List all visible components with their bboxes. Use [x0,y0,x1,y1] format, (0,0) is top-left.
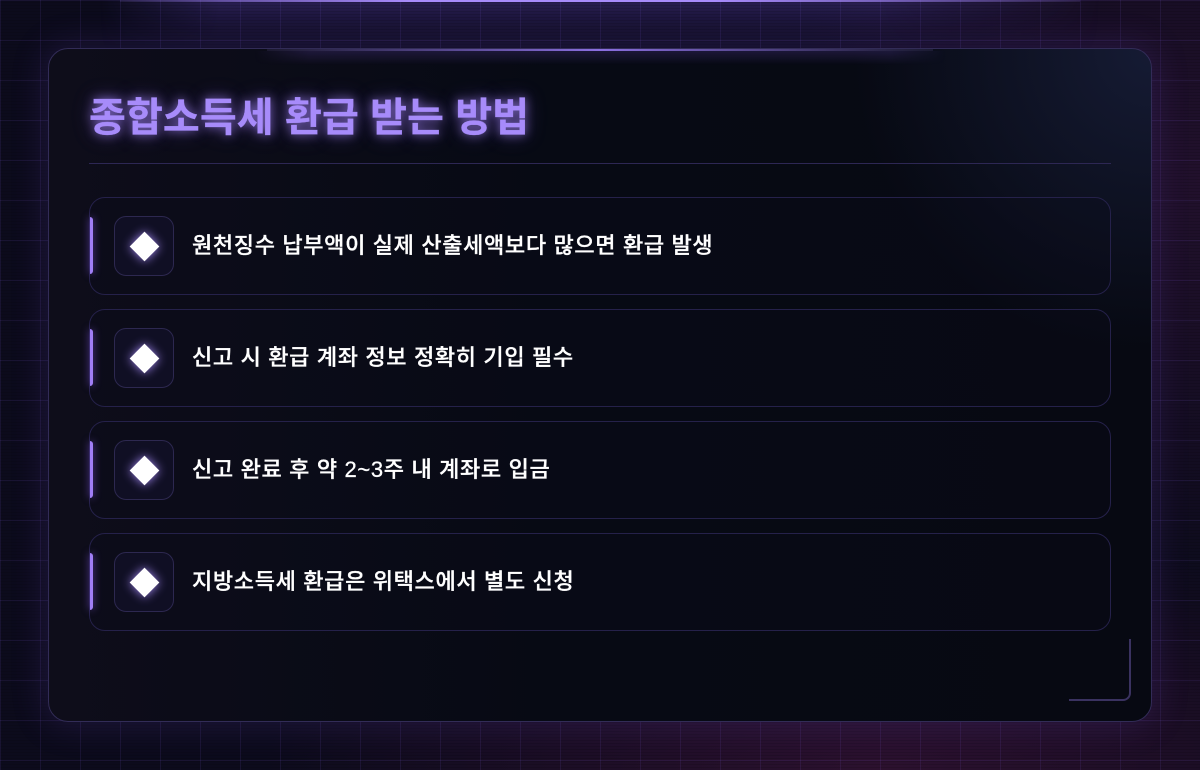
item 4 text: 지방소득세 환급은 위택스에서 별도 신청 [192,569,574,594]
item 2 [89,309,1111,407]
item 4 [89,533,1111,631]
item 3 text: 신고 완료 후 약 2~3주 내 계좌로 입금 [192,457,550,482]
title: 종합소득세 환급 받는 방법 [89,96,529,140]
item 1 [89,197,1111,295]
icon: diamond [114,552,174,612]
item 2 text: 신고 시 환급 계좌 정보 정확히 기입 필수 [192,345,574,370]
item 3 [89,421,1111,519]
icon: diamond [114,216,174,276]
icon: diamond [114,440,174,500]
icon: diamond [114,328,174,388]
item 1 text: 원천징수 납부액이 실제 산출세액보다 많으면 환급 발생 [192,233,713,258]
